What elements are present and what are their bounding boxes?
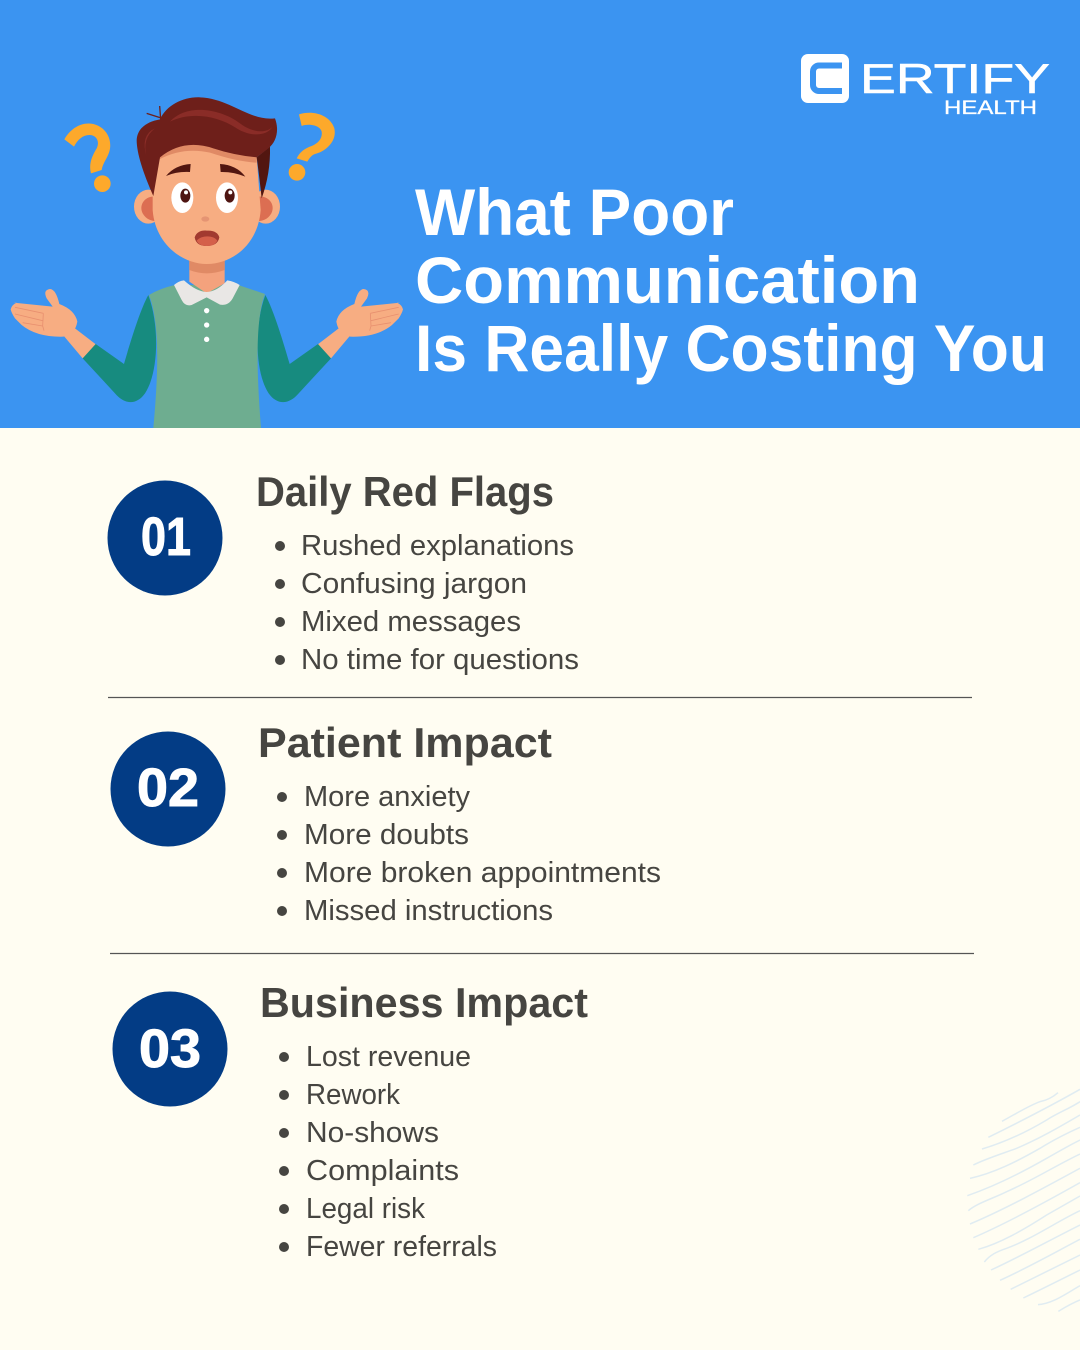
- bullet list: Legal risk: [306, 1193, 425, 1225]
- collar and buttons: [174, 280, 240, 342]
- logo: Certify Health: HEALTH: [944, 98, 1037, 119]
- bullet list: Fewer referrals: [306, 1231, 497, 1263]
- illustration: confused man: [11, 97, 403, 428]
- header band: [0, 0, 1080, 428]
- bullet list: More anxiety: [304, 781, 470, 813]
- eyes: [171, 182, 238, 213]
- bullet list: Rushed explanations: [301, 530, 574, 562]
- face: [153, 143, 261, 264]
- bullet list: Missed instructions: [304, 895, 553, 927]
- heading: Patient Impact: [258, 719, 552, 766]
- number badge 02: 02: [137, 758, 199, 818]
- logo: Certify Health: ERTIFY: [860, 55, 1050, 102]
- bullet list: More broken appointments: [304, 857, 661, 889]
- bullet list: Complaints: [306, 1155, 459, 1187]
- bullet list: No-shows: [306, 1117, 439, 1149]
- title: [415, 175, 1047, 385]
- mouth: [195, 231, 219, 246]
- panel: daily red flags: [108, 468, 579, 676]
- bullet list: [277, 781, 661, 927]
- icon: left question mark: [64, 123, 111, 192]
- eyebrows: [166, 164, 245, 177]
- right arm and hand: [258, 289, 403, 402]
- number badge 03: [112, 992, 228, 1106]
- neck: [189, 257, 225, 293]
- number badge 03: 03: [139, 1019, 201, 1079]
- ears: [134, 190, 280, 224]
- panel: business impact: [112, 979, 588, 1263]
- logo: Certify Health: [801, 54, 1050, 119]
- number badge 01: [108, 480, 222, 596]
- bullet list: Rework: [306, 1079, 400, 1111]
- bullet list: More doubts: [304, 819, 469, 851]
- bullet list: [275, 530, 579, 676]
- bullet list: Lost revenue: [306, 1041, 471, 1073]
- number badge 02: [110, 732, 226, 846]
- title: What Poor: [415, 175, 734, 249]
- hair: [137, 97, 277, 198]
- heading: Business Impact: [260, 979, 588, 1026]
- heading: Daily Red Flags: [256, 468, 554, 515]
- bullet list: No time for questions: [301, 644, 579, 676]
- panel: patient impact: [110, 719, 661, 927]
- green vest: [149, 285, 265, 428]
- title: Communication: [415, 243, 920, 317]
- bullet list: [279, 1041, 497, 1263]
- icon: right question mark: [289, 113, 335, 181]
- title: Is Really Costing You: [415, 311, 1047, 385]
- bullet list: Mixed messages: [301, 606, 521, 638]
- left arm and hand: [11, 289, 156, 402]
- nose: [201, 216, 209, 222]
- bullet list: Confusing jargon: [301, 568, 527, 600]
- number badge 01: 01: [141, 507, 191, 567]
